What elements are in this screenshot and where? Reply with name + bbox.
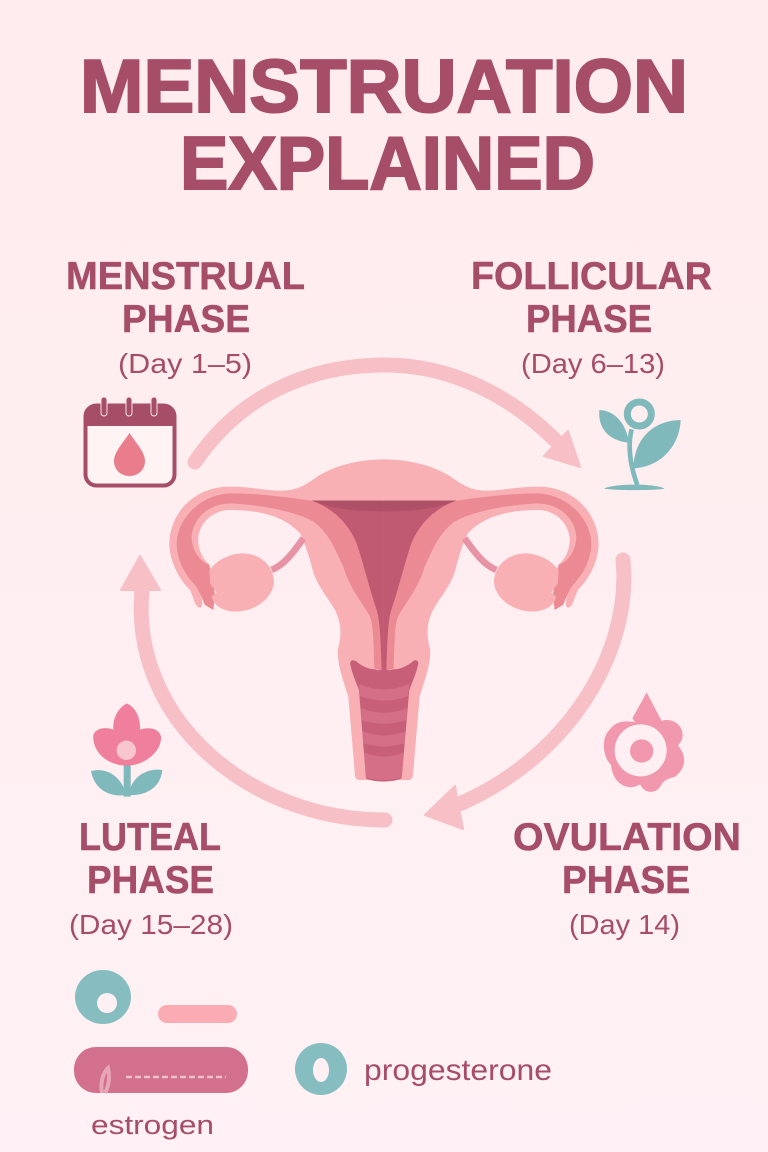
title: MENSTRUATION bbox=[80, 44, 688, 128]
arrow: menstrual to follicular bbox=[195, 365, 580, 467]
icon: calendar with blood drop bbox=[85, 397, 175, 486]
heading: follicular phase: PHASE bbox=[526, 298, 652, 341]
legend: teal ring marker bbox=[75, 970, 131, 1024]
heading: ovulation phase: PHASE bbox=[562, 859, 690, 902]
legend: progesterone marker bbox=[295, 1043, 347, 1095]
heading: menstrual phase: (Day 1–5) bbox=[118, 348, 252, 379]
icon: luteal flower bbox=[91, 703, 162, 797]
legend: rose estrogen bar bbox=[74, 1047, 248, 1093]
legend: pink pill bbox=[158, 1005, 237, 1023]
heading: luteal phase: (Day 15–28) bbox=[69, 909, 233, 940]
arrow: ovulation to luteal bbox=[121, 556, 385, 820]
heading: luteal phase: LUTEAL bbox=[79, 816, 221, 859]
heading: menstrual phase: MENSTRUAL bbox=[66, 255, 305, 298]
arrow: follicular to ovulation bbox=[425, 560, 624, 829]
icon: ovulation flower with egg bbox=[604, 692, 684, 792]
title bbox=[80, 44, 688, 205]
heading: ovulation phase: OVULATION bbox=[513, 816, 741, 859]
legend: progesterone label: progesterone bbox=[364, 1054, 552, 1087]
heading: luteal phase: PHASE bbox=[87, 859, 214, 902]
heading: ovulation phase bbox=[513, 816, 741, 940]
cervix and vaginal canal bbox=[350, 660, 418, 782]
heading: luteal phase bbox=[69, 816, 233, 940]
title: EXPLAINED bbox=[180, 121, 595, 205]
legend: estrogen label: estrogen bbox=[91, 1110, 214, 1140]
heading: menstrual phase bbox=[66, 255, 305, 379]
heading: follicular phase bbox=[471, 255, 712, 379]
illustration: uterus bbox=[169, 459, 599, 782]
heading: follicular phase: (Day 6–13) bbox=[521, 348, 665, 379]
heading: ovulation phase: (Day 14) bbox=[569, 909, 680, 940]
heading: follicular phase: FOLLICULAR bbox=[471, 255, 712, 298]
heading: menstrual phase: PHASE bbox=[122, 298, 250, 341]
icon: sprout with ring bud bbox=[599, 402, 681, 490]
